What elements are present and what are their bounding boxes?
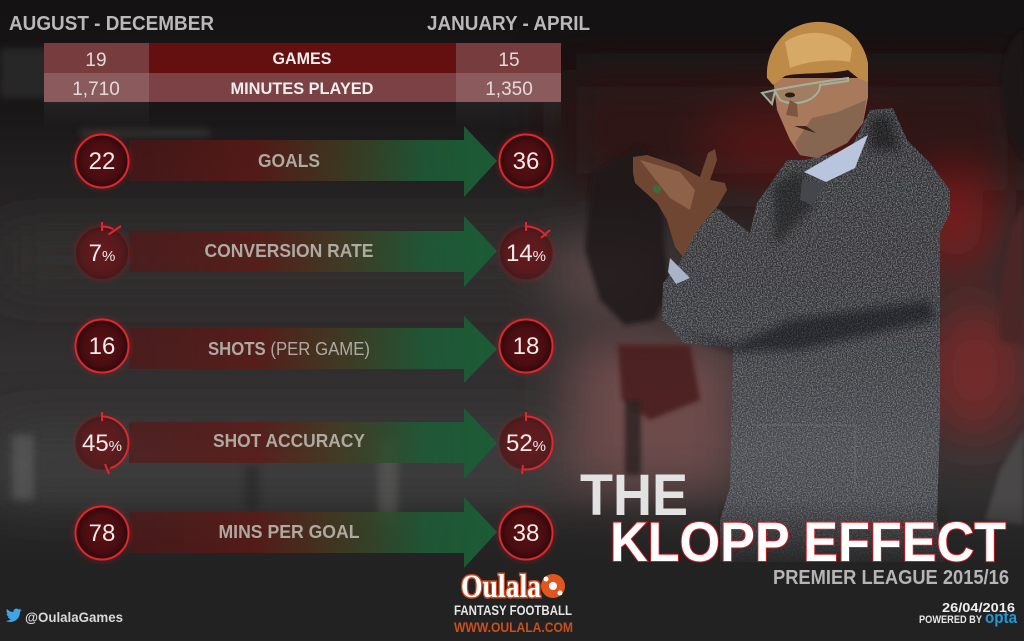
icon: football [541,574,565,598]
background player at right edge [985,30,1024,525]
title: Klopp Effect: KLOPP EFFECT [610,510,1006,573]
row: games: GAMES [272,49,332,68]
stat row: shots per game [75,316,553,383]
date and credit: POWERED BY [919,614,983,626]
right value [499,506,553,560]
bottom fade [0,500,1024,575]
left value [75,412,129,474]
hands [633,149,727,257]
right value [499,134,553,188]
Oulala logo [454,569,573,635]
heading: January - April: JANUARY - APRIL [427,13,590,35]
left value [75,134,129,188]
face [773,78,868,158]
left value [75,319,129,373]
left value [75,222,129,280]
date and credit [919,600,1017,627]
right value: 14% [506,240,546,267]
arrow [129,126,497,197]
Oulala logo: FANTASY FOOTBALL [454,602,572,618]
label: CONVERSION RATE [204,241,374,261]
label: GOALS [258,151,320,171]
stat row: conversion rate [75,216,553,287]
label: SHOT ACCURACY [213,431,365,451]
stubble [795,100,866,158]
right value: 38 [513,520,539,547]
Oulala logo: WWW.OULALA.COM [454,619,573,635]
title: The: THE [580,463,688,528]
left value [75,506,129,560]
right value: 18 [513,333,539,360]
coat shading [680,115,935,352]
arrow [129,497,497,568]
left value: 7% [89,240,115,267]
pocket seams [752,425,855,487]
ring [653,185,661,193]
mouth [794,126,816,133]
cuff [668,258,690,284]
row: minutes played: 1,350 [485,79,533,100]
right value [499,412,553,474]
right value: 36 [513,148,539,175]
row: games: 15 [498,50,520,71]
camera operator silhouette [585,145,700,475]
arrow [129,316,497,383]
row: games [85,49,520,71]
left value: 78 [89,520,115,547]
Oulala logo: Oulala [461,569,541,605]
table: games and minutes [44,43,561,132]
arrow [129,408,497,479]
nose shadow [786,100,798,117]
twitter handle: @OulalaGames [25,609,123,625]
row: minutes played [72,79,533,100]
opta logo: opta [985,608,1017,627]
stat row: mins per goal [75,497,553,568]
row: minutes played: 1,710 [72,79,120,100]
coat bottom fade [718,500,948,562]
stat row: shot accuracy [75,408,553,479]
date and credit: 26/04/2016 [942,600,1015,615]
row: minutes played: MINUTES PLAYED [230,79,374,98]
glasses [762,78,848,104]
heading: August - December: AUGUST - DECEMBER [9,13,215,35]
arrow [129,216,497,287]
subtitle: PREMIER LEAGUE 2015/16 [773,567,1009,589]
row: games: 19 [85,50,107,71]
right value [499,222,553,280]
left value: 16 [89,333,115,360]
photo: Jurgen Klopp [633,22,950,562]
shirt collar and tie [804,135,868,182]
left value: 45% [82,430,122,457]
hair [767,22,868,85]
right value [499,319,553,373]
label: SHOTS (PER GAME) [208,339,370,359]
icon: twitter bird [6,608,22,622]
label: MINS PER GOAL [218,522,360,542]
right value: 52% [506,430,546,457]
left value: 22 [89,148,115,175]
stat row: goals [75,126,553,197]
coat [662,108,950,562]
